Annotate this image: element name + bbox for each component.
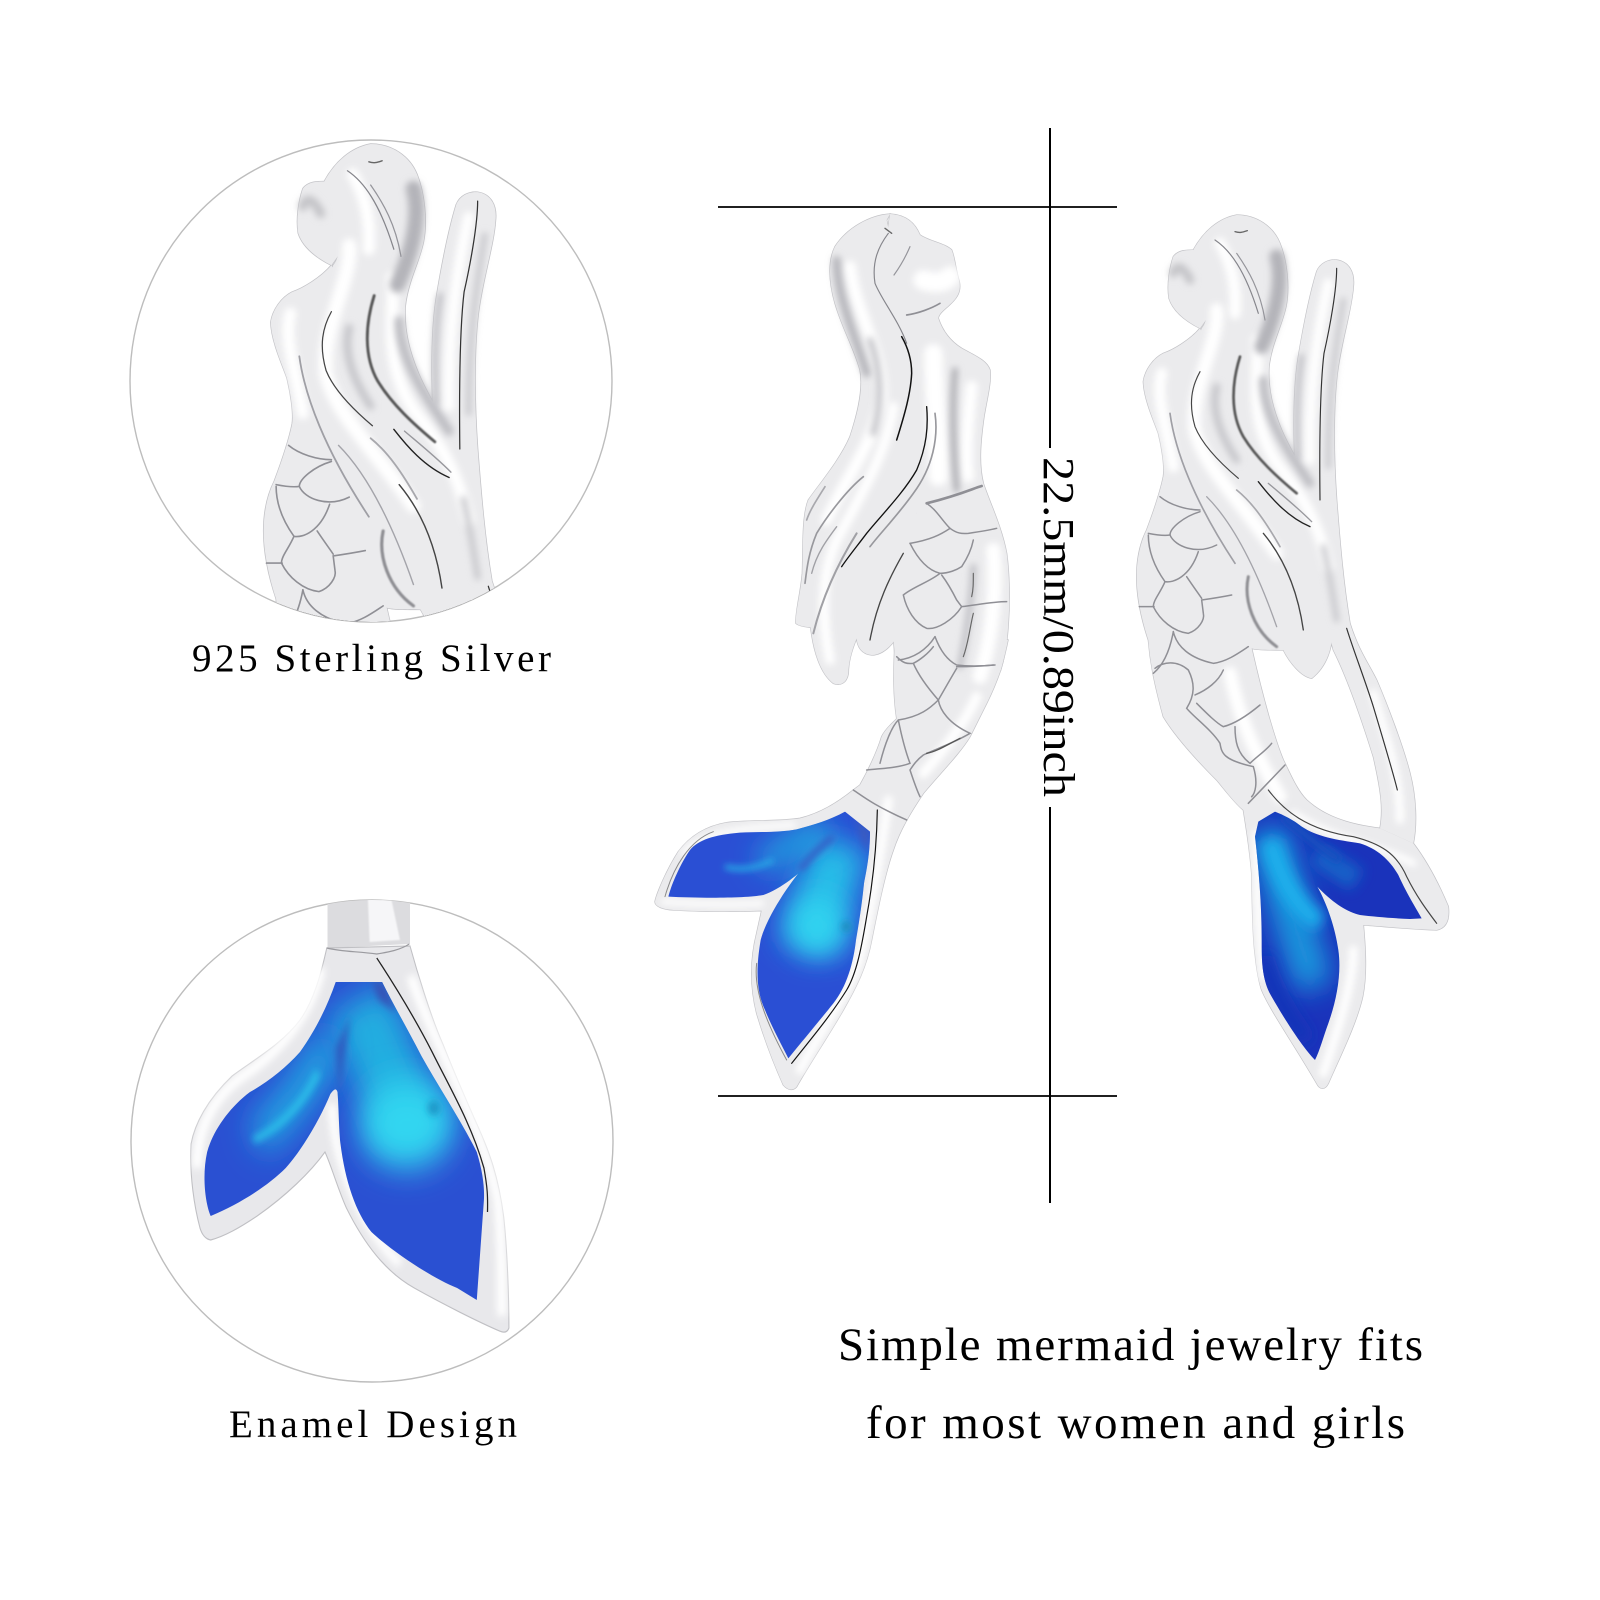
caption: 925 Sterling Silver: 925 Sterling Silver: [192, 637, 551, 680]
circle outline: [131, 900, 613, 1382]
left mermaid earring: [655, 214, 1009, 1089]
circle outline: [130, 140, 612, 622]
panel: enamel detail circle: [131, 896, 613, 1382]
blue enamel tail: [668, 812, 870, 1058]
mermaid outline: [655, 214, 1009, 1089]
mermaid silver fill: [655, 214, 1009, 1089]
tagline line 2: for most women and girls: [866, 1397, 1405, 1449]
zoomed enamel tail: [189, 896, 509, 1332]
caption: Enamel Design: Enamel Design: [229, 1403, 517, 1446]
tagline: [838, 1319, 1423, 1449]
tagline line 1: Simple mermaid jewelry fits: [838, 1319, 1423, 1371]
hair and torso shading: [805, 228, 1007, 677]
dimension lines: [718, 128, 1117, 1203]
zoomed silver mermaid: [263, 143, 496, 622]
panel: silver detail circle: [129, 139, 613, 623]
dimension label: 22.5mm/0.89inch: [1034, 457, 1083, 797]
lower scales and tail details: [663, 647, 993, 1070]
right mermaid earring: [1137, 215, 1449, 1088]
